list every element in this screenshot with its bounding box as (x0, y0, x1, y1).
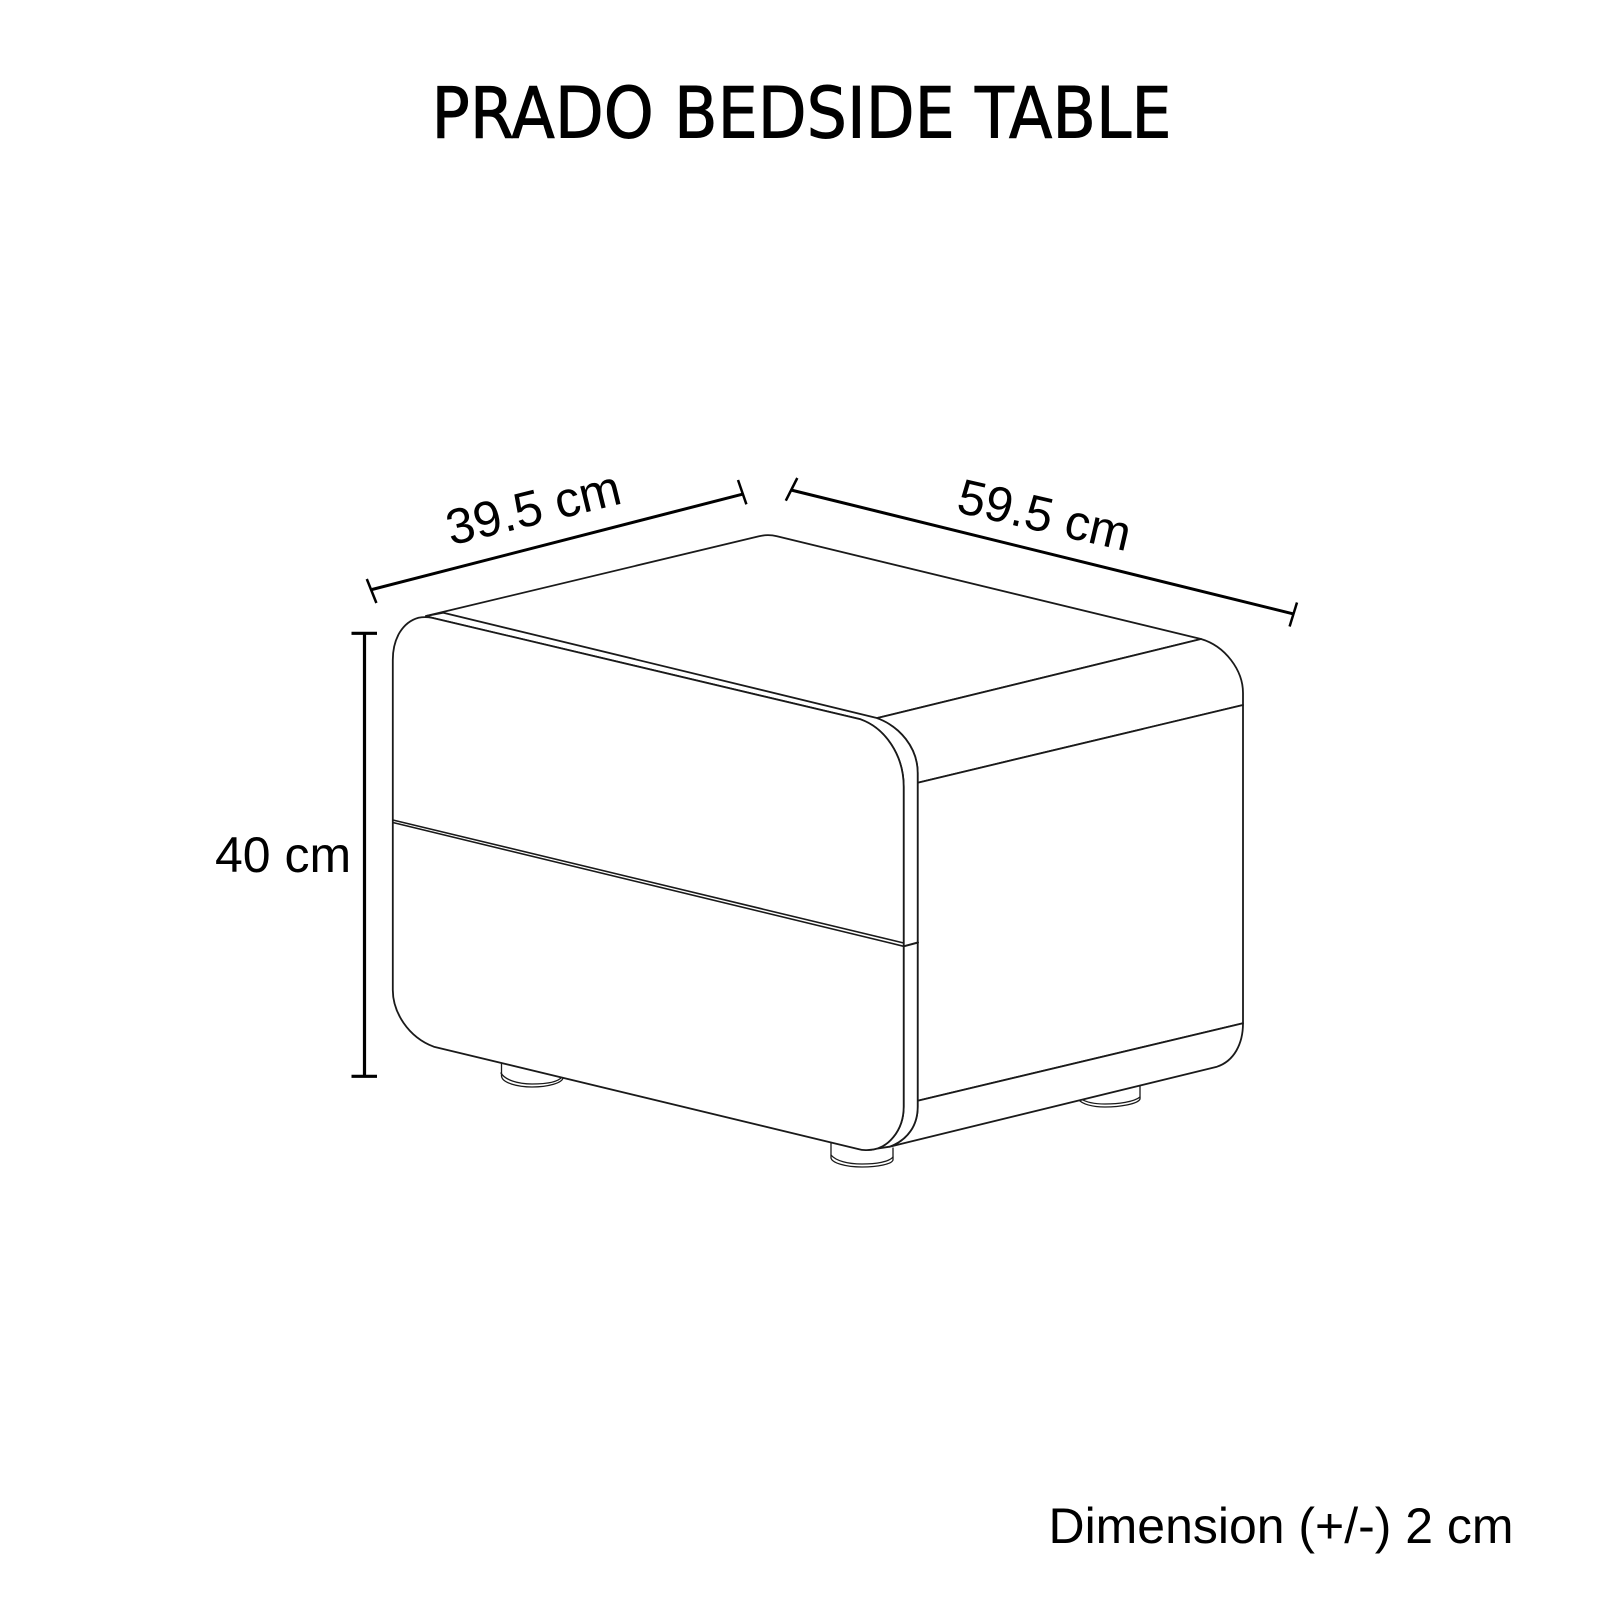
label: 40 cm: 40 cm (215, 827, 351, 883)
bedside table drawing (393, 535, 1243, 1167)
side main face (918, 705, 1243, 1101)
far right foot (1078, 1086, 1140, 1107)
side top band (876, 639, 1243, 783)
drawer fronts outline (393, 617, 904, 1150)
dimension: width 59.5 cm (786, 478, 1297, 626)
footnote: tolerance: Dimension (+/-) 2 cm (1048, 1498, 1514, 1554)
dimension: height 40 cm (352, 633, 377, 1076)
title: PRADO BEDSIDE TABLE (432, 73, 1172, 155)
front edge strip (426, 613, 918, 1150)
label: 59.5 cm: 59.5 cm (953, 469, 1136, 562)
side bottom band (890, 1023, 1243, 1147)
dimension: depth 39.5 cm (367, 480, 746, 603)
side panel (876, 639, 1243, 1147)
front foot (831, 1143, 893, 1167)
back left foot (501, 1063, 563, 1087)
table top surface (426, 535, 1201, 718)
drawer divider (393, 820, 918, 946)
label: 39.5 cm: 39.5 cm (440, 459, 626, 556)
